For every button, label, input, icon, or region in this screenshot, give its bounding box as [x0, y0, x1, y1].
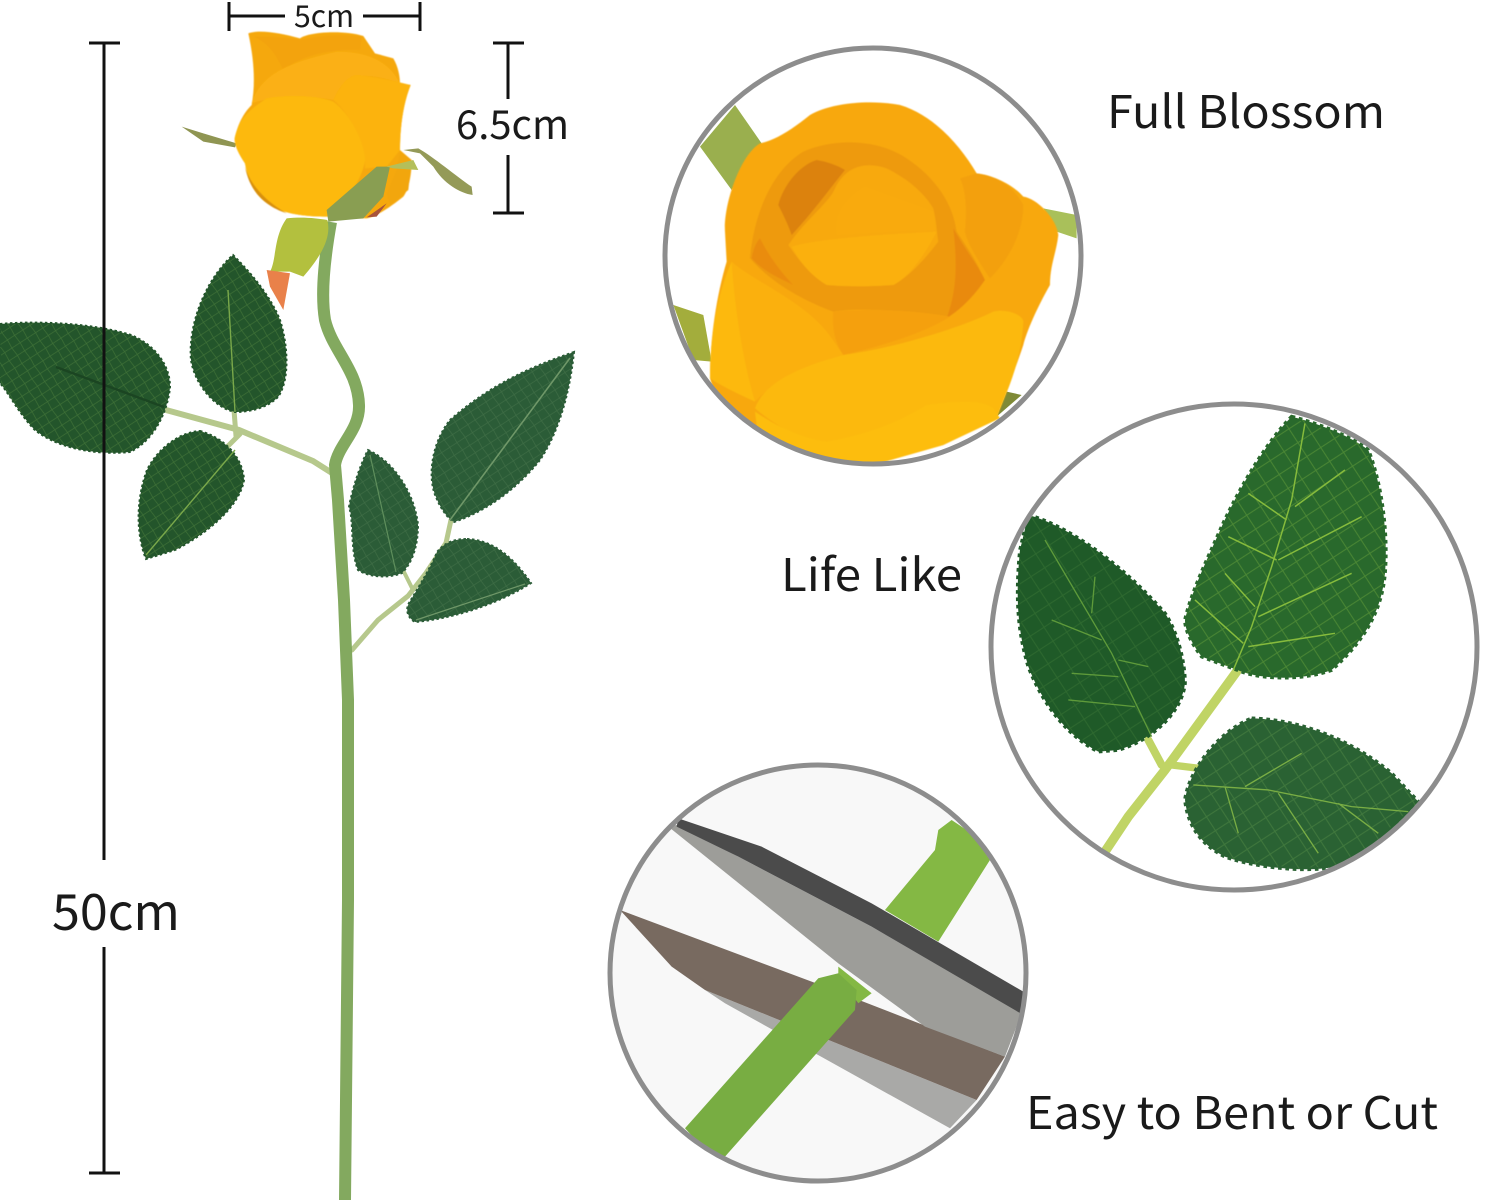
- leaf: beside stem: [349, 450, 418, 576]
- rose bloom: [710, 102, 1058, 478]
- dimension: height 50cm: 50cm: [52, 873, 180, 945]
- upper blade: [668, 818, 1023, 1057]
- leaf: lower left: [139, 431, 244, 559]
- bud petals: [235, 32, 412, 218]
- dimension: bud height 6.5cm: [456, 43, 569, 213]
- leaf branches: [166, 410, 451, 650]
- upper stem piece: [885, 820, 990, 942]
- sepal: right: [403, 148, 473, 195]
- leaf: left: [1018, 515, 1185, 752]
- dimension: width 5cm: [229, 0, 420, 36]
- stem behind bloom: [700, 105, 762, 190]
- dimension: height 50cm: [52, 43, 180, 1173]
- sepal: lower: [270, 218, 328, 277]
- lower stem piece: [685, 967, 872, 1157]
- heading: Easy to Bent or Cut: Easy to Bent or Cut: [1026, 1077, 1438, 1142]
- sepal: front green: [327, 167, 390, 222]
- leaf: far left: [0, 323, 170, 453]
- panel: life like leaves close-up: [991, 404, 1477, 890]
- sepal: lower orange tip: [267, 270, 290, 310]
- dimension: bud height 6.5cm: 6.5cm: [456, 93, 569, 151]
- leaf: lower right: [407, 539, 531, 622]
- illustration: full rose stem: [0, 32, 574, 1200]
- lower blade: [620, 910, 1005, 1128]
- panel: scissors cutting stem close-up: [610, 765, 1026, 1181]
- panel: full blossom close-up: [665, 48, 1081, 478]
- main stem: [323, 222, 359, 1200]
- sepal: left: [182, 127, 237, 147]
- leaf: bottom right: [1185, 718, 1418, 869]
- sepals behind bloom: [673, 208, 1077, 417]
- leaf: upper: [191, 255, 286, 412]
- leaf: top right: [1185, 417, 1386, 678]
- rose bud: [182, 32, 473, 310]
- leaf: far right: [432, 352, 574, 522]
- heading: Full Blossom: Full Blossom: [1107, 76, 1385, 141]
- leaf stems: [1105, 672, 1237, 852]
- heading: Life Like: Life Like: [781, 539, 962, 604]
